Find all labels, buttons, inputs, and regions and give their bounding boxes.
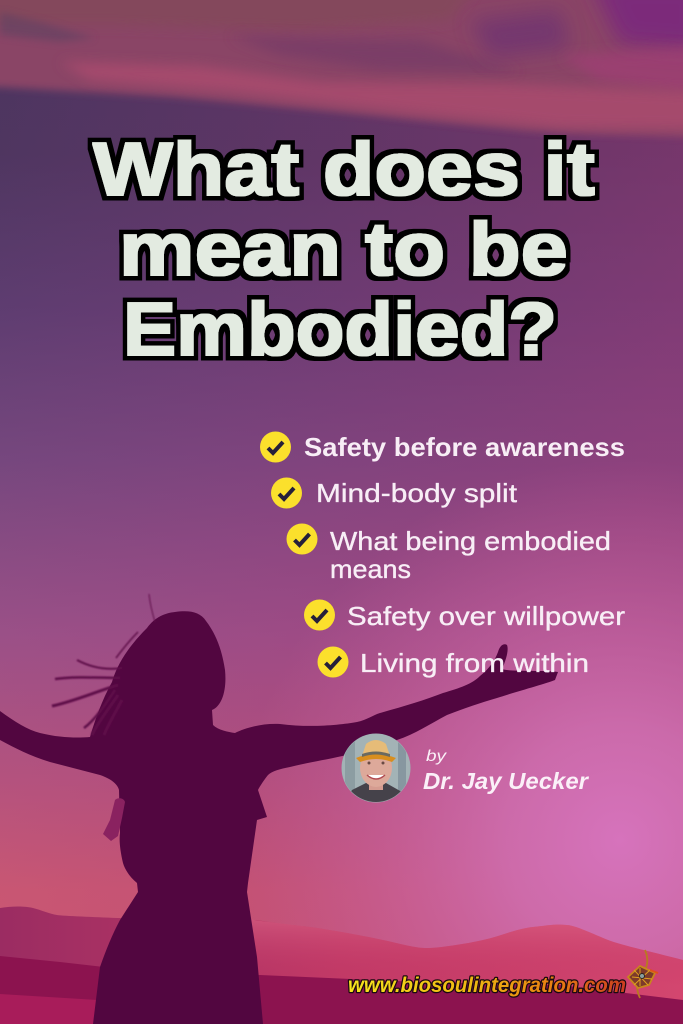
mountains (0, 906, 683, 1024)
item: safety over willpower: Safety over willpower (347, 601, 625, 631)
checklist (260, 432, 625, 678)
website url: www.biosoulintegration.com (348, 974, 626, 997)
author portrait (342, 734, 410, 802)
item: what being embodied means (286, 524, 611, 584)
item: mind-body split: Mind-body split (316, 478, 518, 508)
item: what being embodied means: What being embodied (330, 526, 611, 556)
title line 1: What does it (93, 127, 595, 211)
by label: by (426, 748, 447, 765)
dress bow (103, 798, 125, 841)
author name: Dr. Jay Uecker (423, 768, 589, 794)
clouds at the top (0, 0, 683, 137)
title line 2: mean to be (119, 207, 568, 291)
icon: logo emblem (628, 950, 658, 998)
silhouette: woman with open arms (0, 594, 558, 1024)
item: safety before awareness: Safety before awareness (304, 432, 625, 462)
item: mind-body split (271, 478, 518, 508)
title (93, 127, 595, 371)
author credit (423, 748, 589, 794)
hair strands (52, 594, 155, 735)
item: what being embodied means: means (330, 554, 411, 584)
title line 3: Embodied? (123, 287, 557, 371)
item: living from within: Living from within (360, 648, 589, 678)
